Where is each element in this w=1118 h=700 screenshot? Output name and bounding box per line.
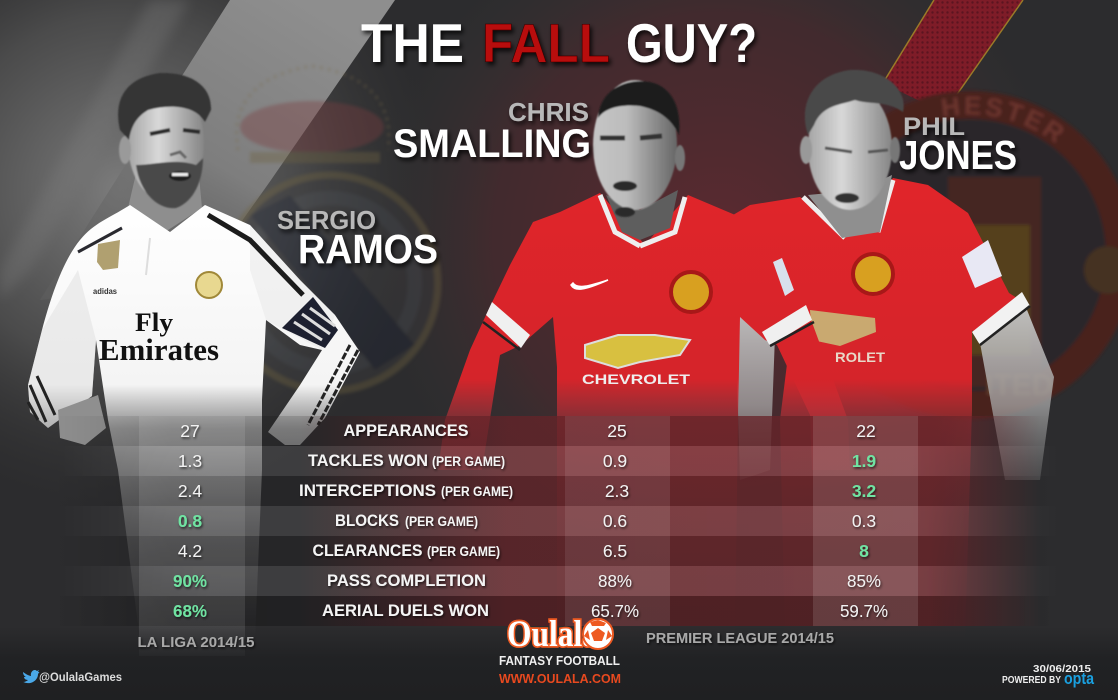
name: Phil Jones bbox=[899, 113, 1017, 178]
Man Utd badge bbox=[853, 254, 893, 294]
diagonal light stripe bbox=[0, 0, 395, 300]
Ramos values bbox=[173, 421, 207, 621]
Oulala logo: Oulala bbox=[507, 614, 598, 655]
Ramos shirt bbox=[28, 205, 360, 640]
Chevrolet bowtie bbox=[585, 335, 690, 368]
Smalling values: 2.3 bbox=[605, 481, 629, 501]
Jones neck bbox=[808, 175, 892, 238]
Ramos neck bbox=[128, 165, 202, 232]
Oulala logo bbox=[499, 614, 621, 686]
name: Sergio Ramos: SERGIO bbox=[277, 205, 376, 235]
twitter handle: @OulalaGames bbox=[39, 670, 122, 684]
stat labels: PASS COMPLETION bbox=[327, 571, 486, 590]
logo tagline: FANTASY FOOTBALL bbox=[499, 653, 620, 668]
Smalling neck bbox=[606, 190, 678, 240]
title: FALL bbox=[482, 12, 610, 74]
Ramos values: 0.8 bbox=[178, 511, 202, 531]
Jones values: 22 bbox=[856, 421, 876, 441]
sponsor text: CHEVROLET bbox=[582, 371, 691, 387]
Smalling shirt bbox=[438, 193, 850, 640]
stat labels bbox=[299, 421, 513, 620]
date and Opta credit: POWERED BY bbox=[1002, 675, 1061, 686]
league label: La Liga: LA LIGA 2014/15 bbox=[138, 634, 254, 651]
Smalling head bbox=[593, 80, 685, 217]
sponsor text bbox=[99, 308, 219, 367]
Jones values: 0.3 bbox=[852, 511, 876, 531]
Smalling values: 88% bbox=[598, 571, 632, 591]
adidas logo: adidas bbox=[93, 287, 118, 296]
stat labels: APPEARANCES bbox=[344, 421, 468, 440]
Ramos gold badge bbox=[97, 240, 120, 270]
Jones values: 85% bbox=[847, 571, 881, 591]
stat labels: (PER GAME) bbox=[441, 484, 513, 499]
Manchester United crest watermark bbox=[814, 89, 1118, 418]
Smalling values: 65.7% bbox=[591, 601, 639, 621]
player: Chris Smalling bbox=[438, 80, 850, 640]
Ramos values: 2.4 bbox=[178, 481, 202, 501]
Jones values bbox=[840, 421, 888, 621]
sponsor text: Fly bbox=[135, 308, 173, 337]
Jones arms bbox=[735, 305, 1054, 480]
Jones values: 59.7% bbox=[840, 601, 888, 621]
Smalling values: 0.6 bbox=[603, 511, 627, 531]
Manchester United stripe bbox=[883, 0, 1023, 113]
Ramos values: 1.3 bbox=[178, 451, 202, 471]
stat labels: CLEARANCES bbox=[312, 541, 422, 560]
Jones values: 1.9 bbox=[852, 451, 876, 471]
stat labels: TACKLES WON bbox=[308, 451, 428, 470]
Ramos hand bbox=[58, 395, 106, 445]
league label: Premier League: PREMIER LEAGUE 2014/15 bbox=[646, 630, 834, 647]
Jones values: 3.2 bbox=[852, 481, 876, 501]
Man Utd badge bbox=[671, 272, 711, 312]
Real Madrid crest watermark bbox=[222, 66, 438, 391]
name: Phil Jones: PHIL bbox=[903, 113, 965, 141]
icon: twitter bird bbox=[23, 670, 40, 683]
Jones head bbox=[800, 70, 904, 210]
Manchester United crest watermark: ITED bbox=[985, 369, 1053, 402]
name: Chris Smalling bbox=[393, 97, 591, 166]
bottom fade bbox=[0, 626, 1118, 700]
Chevrolet bowtie bbox=[810, 310, 876, 346]
date and Opta credit bbox=[1002, 663, 1094, 688]
title: THE bbox=[361, 12, 464, 74]
logo football bbox=[583, 619, 613, 649]
Nike swoosh bbox=[571, 280, 608, 289]
stat labels: (PER GAME) bbox=[405, 514, 478, 529]
Real Madrid badge bbox=[196, 272, 222, 298]
Ramos values: 4.2 bbox=[178, 541, 202, 561]
sponsor text: ROLET bbox=[835, 349, 885, 365]
Smalling values: 25 bbox=[607, 421, 627, 441]
Ramos values: 90% bbox=[173, 571, 207, 591]
title: GUY? bbox=[626, 12, 757, 74]
name: Chris Smalling: SMALLING bbox=[393, 122, 591, 166]
Ramos head bbox=[118, 73, 211, 208]
Smalling values bbox=[591, 421, 639, 621]
name: Sergio Ramos: RAMOS bbox=[298, 226, 438, 272]
player: Phil Jones bbox=[733, 70, 1054, 640]
Smalling values: 0.9 bbox=[603, 451, 627, 471]
stat labels: BLOCKS bbox=[335, 511, 399, 530]
Manchester United crest watermark: HESTER bbox=[941, 95, 1064, 143]
Ramos values: 27 bbox=[180, 421, 200, 441]
player: Sergio Ramos bbox=[28, 73, 360, 640]
name: Chris Smalling: CHRIS bbox=[508, 97, 589, 127]
date and Opta credit: opta bbox=[1064, 669, 1094, 688]
stat labels: INTERCEPTIONS bbox=[299, 481, 436, 500]
Smalling values: 6.5 bbox=[603, 541, 627, 561]
name: Sergio Ramos bbox=[277, 205, 438, 272]
sleeve patch bbox=[773, 258, 794, 296]
stats table background bbox=[50, 416, 1060, 656]
name: Phil Jones: JONES bbox=[899, 132, 1017, 178]
stat labels: (PER GAME) bbox=[427, 544, 500, 559]
Jones values: 8 bbox=[859, 541, 869, 561]
sponsor text: Emirates bbox=[99, 332, 219, 367]
date and Opta credit: 30/06/2015 bbox=[1033, 663, 1091, 675]
Jones shirt bbox=[733, 178, 1030, 640]
logo URL: WWW.OULALA.COM bbox=[499, 671, 621, 686]
Ramos values: 68% bbox=[173, 601, 207, 621]
stat labels: AERIAL DUELS WON bbox=[322, 601, 489, 620]
stat labels: (PER GAME) bbox=[432, 454, 505, 469]
title bbox=[361, 12, 757, 74]
